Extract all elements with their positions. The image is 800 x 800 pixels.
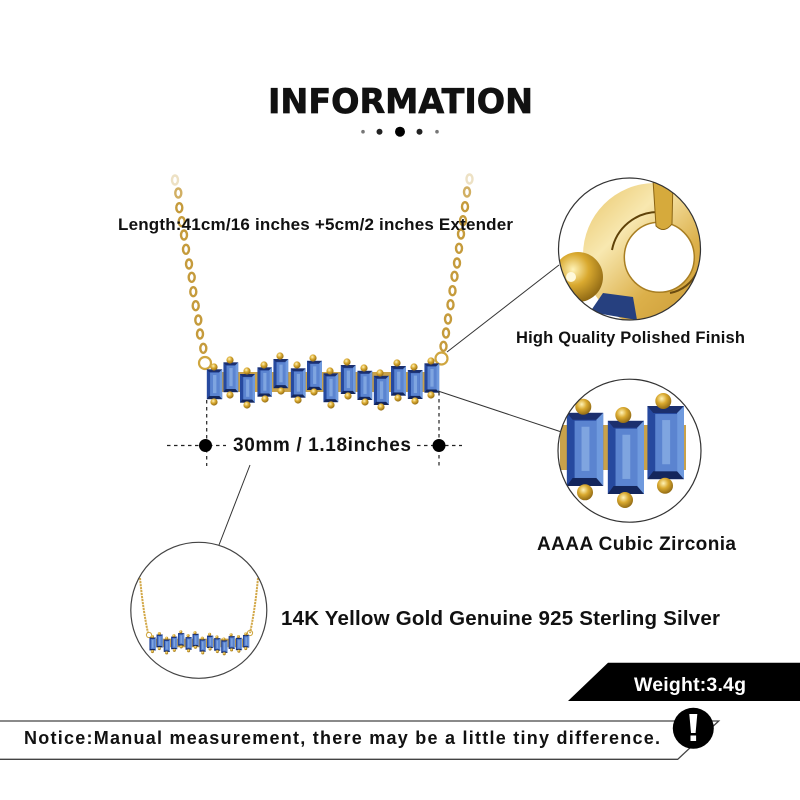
label: cubic zirconia: AAAA Cubic Zirconia (537, 534, 736, 555)
label: polished finish: High Quality Polished Finish (516, 329, 745, 347)
notice box: Notice:Manual measurement, there may be a little tiny difference. (24, 728, 660, 748)
length label: Length:41cm/16 inches +5cm/2 inches Extender (118, 215, 513, 234)
notice box (0, 721, 719, 759)
necklace photo (172, 174, 472, 411)
callout lines (219, 265, 560, 545)
title dots ornament (361, 127, 439, 137)
detail circle: cubic zirconia (558, 379, 701, 522)
title: INFORMATION (268, 82, 533, 122)
width dimension (167, 392, 462, 466)
width dimension: 30mm / 1.18inches (233, 435, 411, 456)
weight banner: Weight:3.4g (634, 674, 746, 696)
weight banner (568, 663, 800, 701)
material text: 14K Yellow Gold Genuine 925 Sterling Silver (281, 607, 720, 630)
icon: exclamation (673, 708, 714, 749)
detail circle: full necklace (131, 542, 267, 678)
detail circle: polished finish (558, 177, 702, 321)
